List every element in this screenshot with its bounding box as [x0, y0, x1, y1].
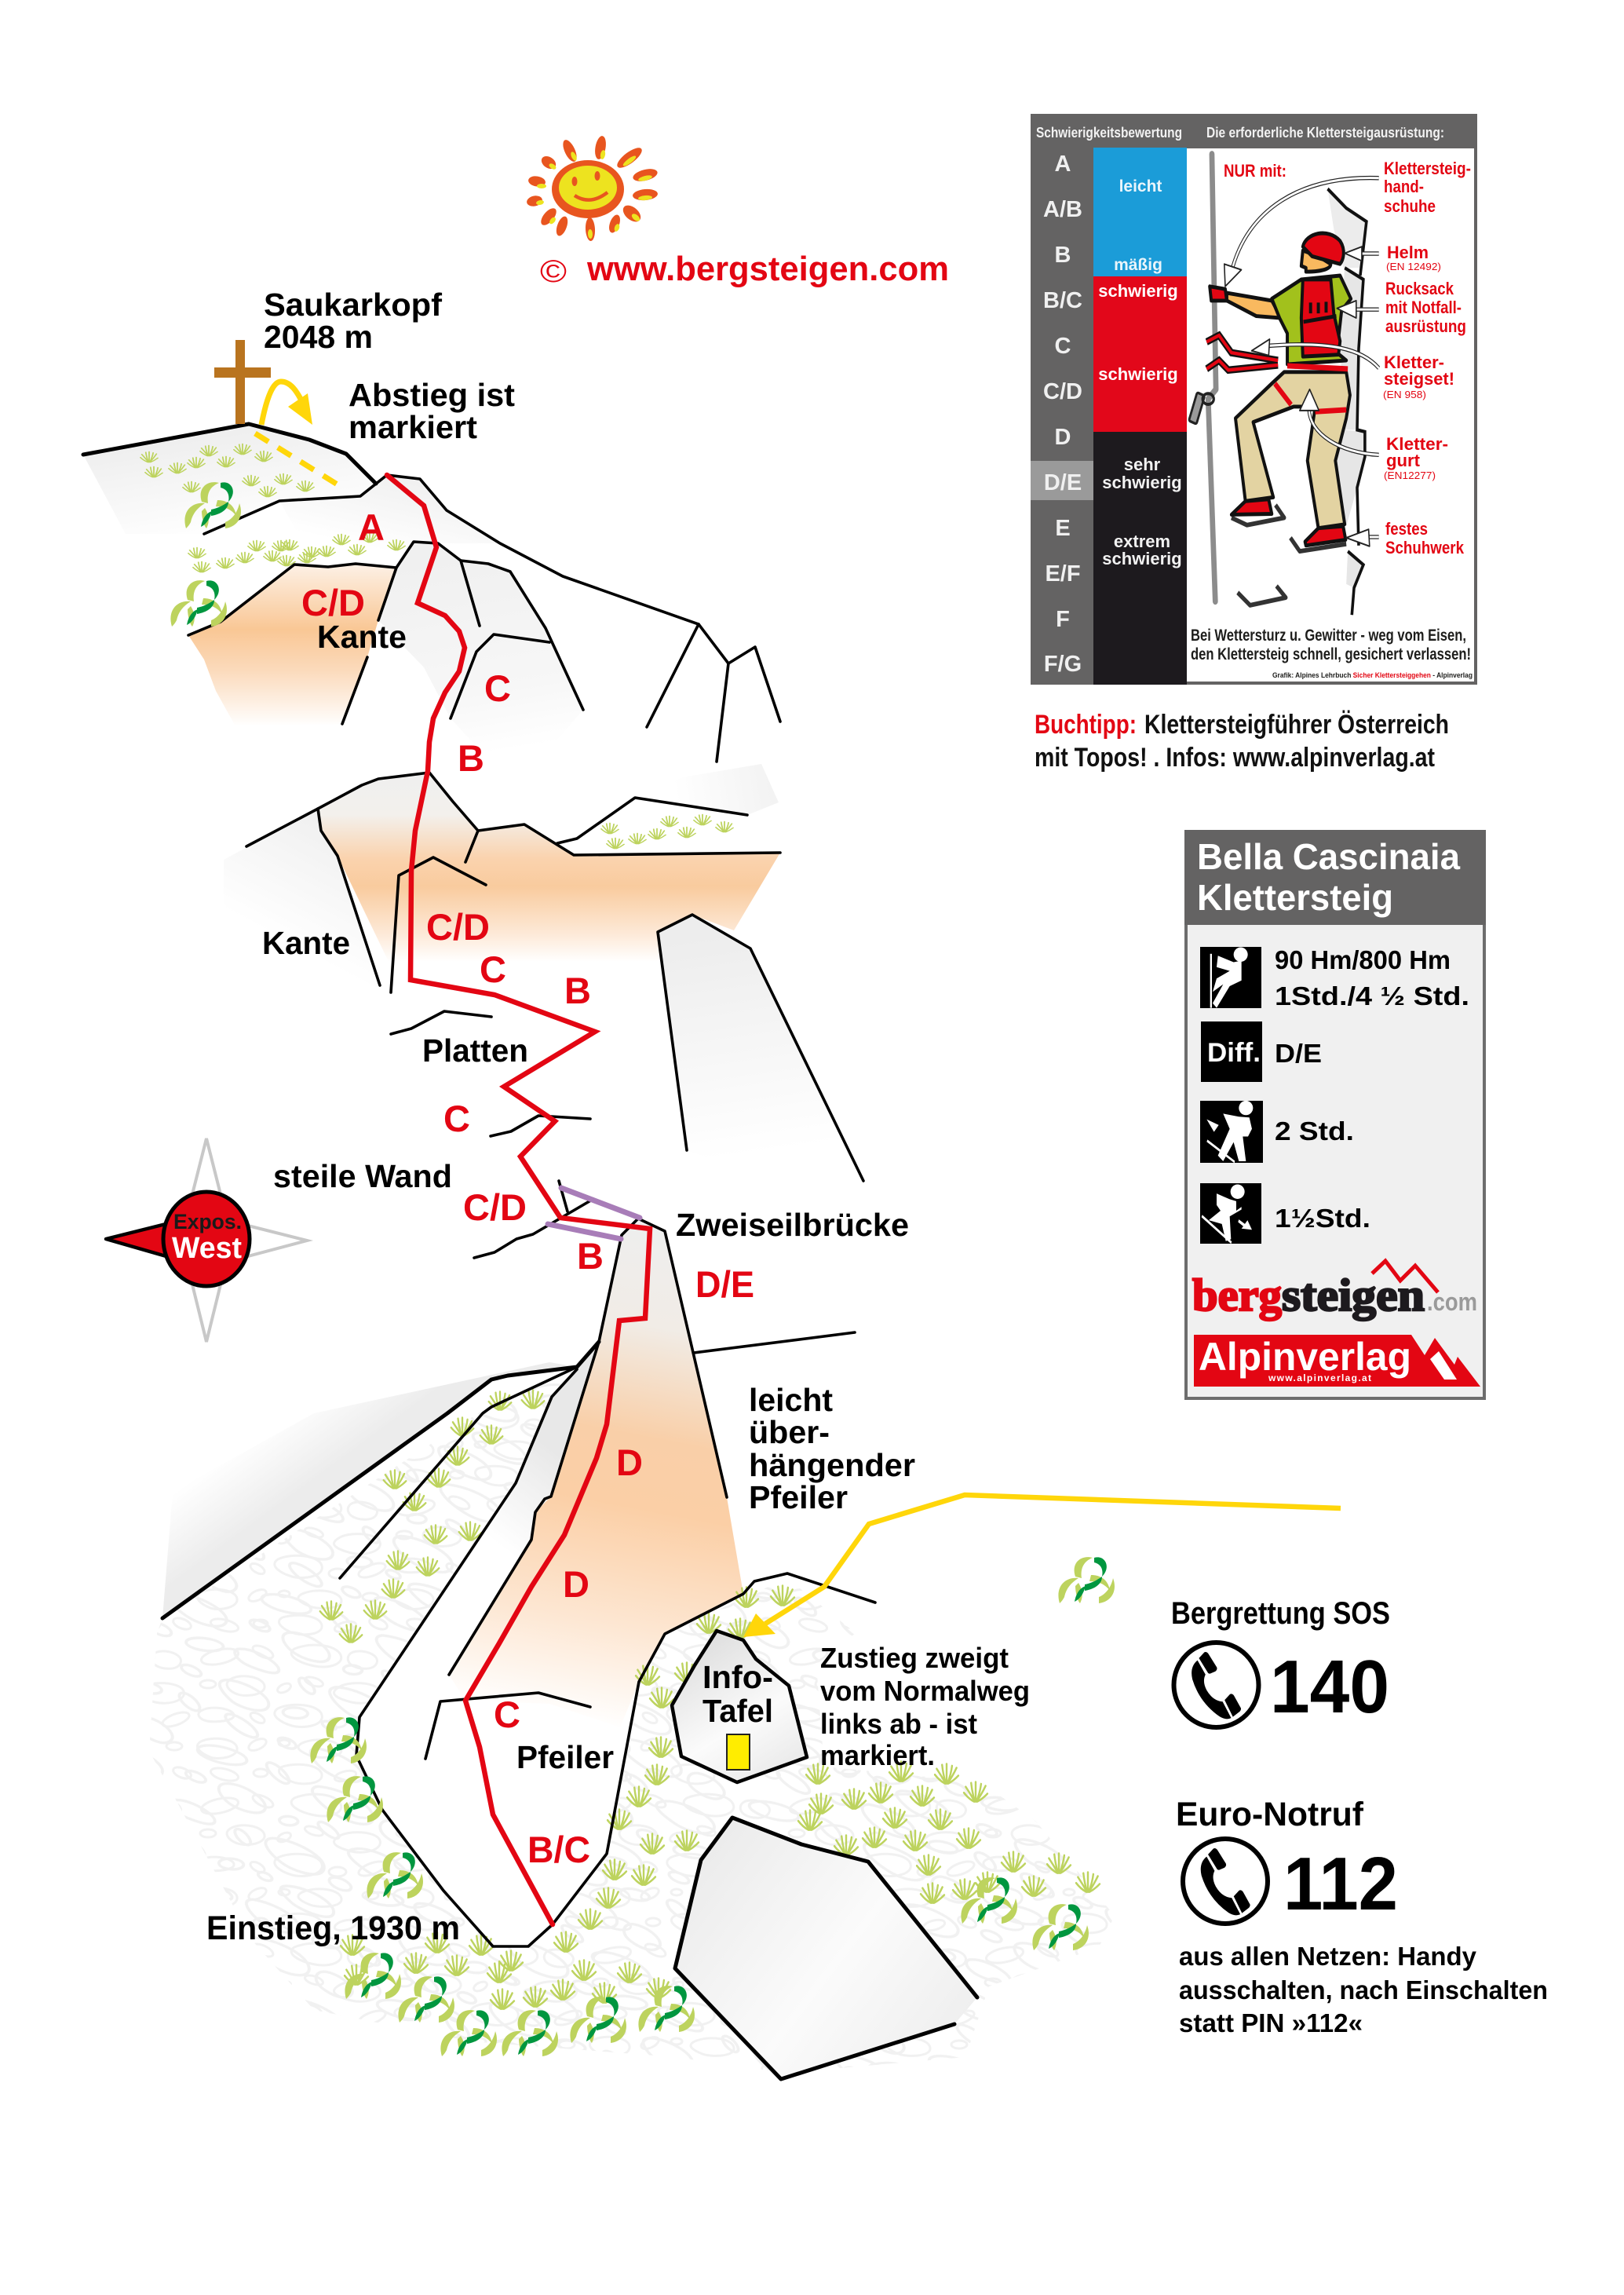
pillar label: über-: [749, 1414, 830, 1450]
grade letters: E: [1055, 516, 1071, 541]
equipment labels: Helm: [1387, 243, 1429, 262]
mountain rescue number: 140: [1270, 1645, 1389, 1729]
graphic credit: Grafik: Alpines Lehrbuch Sicher Klettersteiggehen - Alpinverlag: [1272, 671, 1473, 679]
emergency note: aus allen Netzen: Handy: [1179, 1942, 1477, 1971]
route labels: B: [458, 737, 484, 779]
tour data text: 1Std./4 ½ Std.: [1275, 981, 1469, 1010]
card title: Klettersteig: [1197, 877, 1393, 918]
panel headers: [1036, 125, 1444, 141]
approach note: links ab - ist: [820, 1708, 977, 1740]
white arrows: [1224, 178, 1379, 546]
icon: climbing: [1200, 947, 1261, 1008]
equipment labels: ausrüstung: [1385, 316, 1466, 336]
scree pebble texture: [149, 1370, 1115, 2073]
difficulty colour columns: [1031, 148, 1187, 685]
tour data text: 2 Std.: [1275, 1116, 1354, 1146]
mountain rescue number: [1171, 1596, 1390, 1729]
icon: difficulty: [1201, 1021, 1262, 1082]
logo: bergsteigen.com: berg: [1192, 1270, 1282, 1321]
grade letters: A/B: [1043, 197, 1082, 222]
grass tufts: [141, 444, 1100, 2008]
route labels: C: [480, 948, 506, 990]
difficulty words: schwierig: [1098, 281, 1178, 301]
pillar label: Pfeiler: [749, 1479, 848, 1515]
equipment labels: schuhe: [1384, 196, 1436, 216]
equipment labels: (EN 12492): [1386, 261, 1441, 272]
terrain labels: Platten: [422, 1032, 528, 1069]
pillar label: hängender: [749, 1447, 915, 1483]
grade letters: [1043, 152, 1082, 677]
card title: Bella Cascinaia: [1197, 836, 1460, 877]
bushes: [170, 482, 1115, 2056]
logo: bergsteigen.com: [1192, 1261, 1477, 1321]
icon: telephone: [1183, 1839, 1268, 1924]
emergency note: [1179, 1942, 1548, 2037]
rock shading: middle band: [224, 764, 863, 1186]
difficulty words: schwierig: [1102, 549, 1182, 568]
route labels: B/C: [527, 1829, 590, 1870]
info board boulder: [672, 1631, 807, 1782]
card title: [1197, 836, 1460, 918]
via ferrata set: [1206, 335, 1278, 370]
terrain labels: [206, 619, 909, 1947]
grade letters: E/F: [1045, 561, 1081, 587]
grade letters: B: [1055, 243, 1071, 268]
icon: telephone: [1174, 1643, 1259, 1727]
descent note: [349, 377, 515, 445]
euro emergency number: [1176, 1796, 1398, 1926]
logo: Alpinverlag: www.alpinverlag.at: [1268, 1372, 1371, 1383]
difficulty words: leicht: [1119, 177, 1162, 196]
route labels: B: [577, 1235, 604, 1277]
equipment labels: Kletter-: [1386, 434, 1448, 454]
climber illustration: [1189, 154, 1379, 615]
equipment labels: steigset!: [1384, 369, 1454, 389]
approach note: vom Normalweg: [820, 1675, 1030, 1707]
route labels: D: [563, 1563, 589, 1605]
grade letters: A: [1055, 152, 1071, 177]
copyright website: ©: [540, 254, 567, 289]
grade letters: F/G: [1044, 652, 1082, 677]
pillar label: [749, 1382, 915, 1515]
equipment labels: (EN 958): [1383, 389, 1426, 400]
iron rungs: [1232, 505, 1346, 605]
panel: tour info card: [1184, 830, 1486, 1398]
grade letters: D/E: [1044, 470, 1082, 495]
mountain rescue number: Bergrettung SOS: [1171, 1596, 1390, 1631]
icon: sun: [526, 135, 659, 241]
difficulty words: schwierig: [1102, 473, 1182, 492]
red route line: [387, 475, 650, 1924]
difficulty words: extrem: [1114, 532, 1170, 551]
weather warning: Bei Wettersturz u. Gewitter - weg vom Eisen,: [1191, 627, 1466, 645]
route labels: [301, 506, 754, 1870]
euro emergency number: Euro-Notruf: [1176, 1796, 1364, 1833]
terrain labels: Pfeiler: [516, 1739, 614, 1775]
panel headers: Schwierigkeitsbewertung: [1036, 125, 1182, 141]
grade letters: C: [1055, 334, 1071, 359]
equipment labels: [1224, 159, 1471, 557]
summit name: Saukarkopf: [264, 287, 442, 323]
logo: bergsteigen.com: steigen: [1282, 1270, 1425, 1321]
route labels: C/D: [301, 582, 365, 623]
route labels: B: [564, 970, 591, 1011]
equipment labels: Rucksack: [1385, 279, 1454, 298]
approach arrow: [743, 1495, 1341, 1637]
grade letters: C/D: [1043, 379, 1082, 404]
rock shading: lower pillar: [162, 1219, 743, 1946]
equipment labels: gurt: [1386, 451, 1421, 470]
route labels: D/E: [695, 1263, 754, 1305]
terrain labels: Einstieg, 1930 m: [206, 1909, 460, 1947]
euro emergency number: 112: [1283, 1842, 1398, 1926]
route labels: C: [443, 1098, 470, 1139]
equipment labels: festes: [1385, 519, 1428, 539]
lower boulder: [675, 1818, 977, 2079]
icon: descent: [1200, 1183, 1261, 1244]
difficulty words: [1098, 177, 1182, 568]
grade letters: D: [1055, 425, 1071, 450]
equipment labels: (EN12277): [1384, 470, 1436, 481]
rock outlines: [83, 424, 875, 1946]
copyright website: www.bergsteigen.com: [586, 250, 949, 288]
terrain labels: Zweiseilbrücke: [676, 1207, 909, 1243]
route labels: D: [616, 1442, 643, 1483]
equipment labels: hand-: [1384, 177, 1424, 196]
logo: Alpinverlag: [1194, 1335, 1480, 1387]
summit cross: [214, 340, 271, 424]
grade letters: F: [1056, 607, 1070, 632]
emergency note: statt PIN »112«: [1179, 2008, 1363, 2037]
book tip: [1035, 710, 1449, 773]
route labels: A: [358, 506, 385, 548]
weather warning: den Klettersteig schnell, gesichert verlassen!: [1191, 645, 1471, 663]
tour data text: 1½Std.: [1275, 1204, 1370, 1233]
descent dashed path: [255, 433, 340, 486]
book tip: mit Topos! . Infos: www.alpinverlag.at: [1035, 743, 1435, 773]
weather warning: [1191, 627, 1471, 663]
approach note: Zustieg zweigt: [820, 1642, 1009, 1674]
descent arrow: [261, 382, 312, 425]
equipment white area: [1187, 148, 1474, 682]
equipment labels: mit Notfall-: [1385, 298, 1462, 317]
compass: exposition west: West: [172, 1232, 242, 1265]
terrain labels: steile Wand: [273, 1158, 452, 1194]
difficulty words: sehr: [1124, 455, 1161, 474]
tour data text: D/E: [1275, 1039, 1322, 1068]
equipment labels: Schuhwerk: [1385, 538, 1465, 557]
icon: difficulty: Diff.: [1207, 1038, 1261, 1068]
route labels: C: [494, 1694, 520, 1735]
pillar label: leicht: [749, 1382, 833, 1418]
approach note: markiert.: [820, 1739, 935, 1771]
info board boulder: Tafel: [703, 1693, 773, 1729]
approach note: [820, 1642, 1030, 1771]
route labels: C: [484, 667, 511, 709]
grade letters: B/C: [1043, 288, 1082, 313]
panel headers: Die erforderliche Klettersteigausrüstung:: [1206, 125, 1444, 141]
difficulty words: mäßig: [1114, 256, 1162, 274]
two-cable bridge: [548, 1188, 640, 1239]
route labels: C/D: [463, 1186, 527, 1228]
icon: ascent: [1200, 1101, 1263, 1163]
summit name: [264, 287, 442, 355]
summit name: 2048 m: [264, 319, 373, 355]
book tip: Klettersteigführer Österreich: [1144, 710, 1449, 740]
terrain labels: Kante: [262, 925, 350, 961]
descent note: Abstieg ist: [349, 377, 515, 413]
compass: exposition west: Expos.: [173, 1210, 242, 1233]
rock behind climber: [1327, 188, 1367, 615]
logo: Alpinverlag: Alpinverlag: [1199, 1335, 1411, 1379]
logo: bergsteigen.com: .com: [1427, 1288, 1477, 1316]
info board boulder: Info-: [703, 1659, 773, 1695]
lower boulder outline: [675, 1818, 977, 2079]
emergency note: ausschalten, nach Einschalten: [1179, 1975, 1548, 2004]
steel cable: [1189, 154, 1216, 601]
compass: exposition west: [106, 1138, 307, 1342]
difficulty words: schwierig: [1098, 364, 1178, 384]
panel: difficulty scale and equipment: [1031, 114, 1477, 685]
book tip: Buchtipp:: [1035, 710, 1137, 740]
equipment labels: NUR mit:: [1224, 161, 1286, 181]
equipment labels: Klettersteig-: [1384, 159, 1471, 178]
terrain labels: Kante: [317, 619, 407, 655]
equipment labels: Kletter-: [1384, 353, 1444, 372]
rock shading: summit and upper wall: [83, 424, 583, 758]
descent note: markiert: [349, 409, 477, 445]
climber figure: [1210, 233, 1351, 546]
tour data text: 90 Hm/800 Hm: [1275, 945, 1451, 974]
tour data text: [1275, 945, 1469, 1233]
route labels: C/D: [426, 906, 490, 948]
